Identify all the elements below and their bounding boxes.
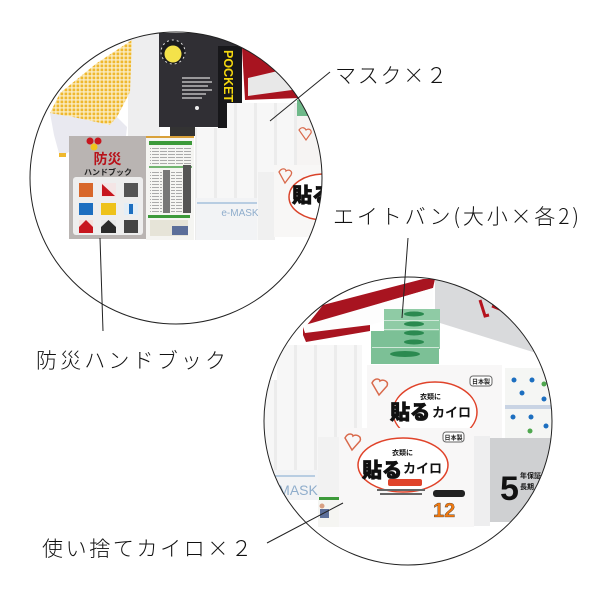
disaster handbook (69, 136, 146, 239)
silver battery pack: 5 (500, 470, 519, 508)
polka dot tissue box (505, 368, 555, 438)
disaster handbook: 防災 (94, 151, 122, 167)
green bandage (297, 100, 308, 116)
disaster handbook: ハンドブック (84, 167, 132, 177)
silver battery pack: 年保証 (520, 471, 541, 480)
leaflet corner (318, 497, 340, 527)
bandages (371, 309, 440, 364)
mask, front: e-MASK (221, 208, 259, 219)
glove (50, 40, 132, 157)
label: heat packs: 使い捨てカイロ×２ (42, 533, 252, 563)
leader line: masks (270, 72, 330, 121)
heat pack, back (371, 376, 492, 428)
handbook inner page (146, 136, 194, 240)
black poncho package (159, 33, 242, 136)
leader line: bandages (402, 238, 408, 318)
heat pack, back: 日本製 (472, 378, 490, 386)
heat pack, back: 貼る (390, 401, 430, 424)
heat pack: 貼る (292, 184, 332, 207)
heat pack (274, 165, 322, 237)
heat pack, front: 貼る (362, 459, 402, 482)
black poncho package: POCKET (221, 50, 235, 102)
red kit box (242, 48, 300, 100)
label: disaster handbook: 防災ハンドブック (36, 345, 226, 375)
heat pack, back: カイロ (432, 405, 471, 420)
heat pack, front (339, 428, 474, 527)
masks (274, 345, 357, 500)
red kit box (303, 279, 435, 342)
masks: MASK (278, 482, 318, 498)
photo circle: upper kit contents (30, 32, 322, 324)
silver battery pack: 長期 (520, 482, 534, 491)
mask, front (195, 128, 259, 240)
heat pack, front: カイロ (403, 461, 442, 476)
leader line: handbook (100, 238, 103, 331)
silver box (435, 280, 534, 352)
heat pack, front: 12 (433, 500, 455, 522)
heat pack, front: 日本製 (444, 434, 463, 442)
silver battery pack (473, 436, 558, 526)
heat pack, back: 衣類に (420, 392, 441, 401)
leader line: heat packs (267, 503, 343, 543)
label: masks: マスク×２ (335, 60, 447, 90)
label: bandages: エイトバン(大小×各2) (333, 201, 579, 231)
mask, back (227, 103, 297, 165)
clear bag (128, 33, 160, 136)
heat pack, front: 衣類に (392, 448, 413, 457)
small heat pack logo (299, 128, 311, 140)
photo circle: lower kit contents (262, 275, 560, 569)
